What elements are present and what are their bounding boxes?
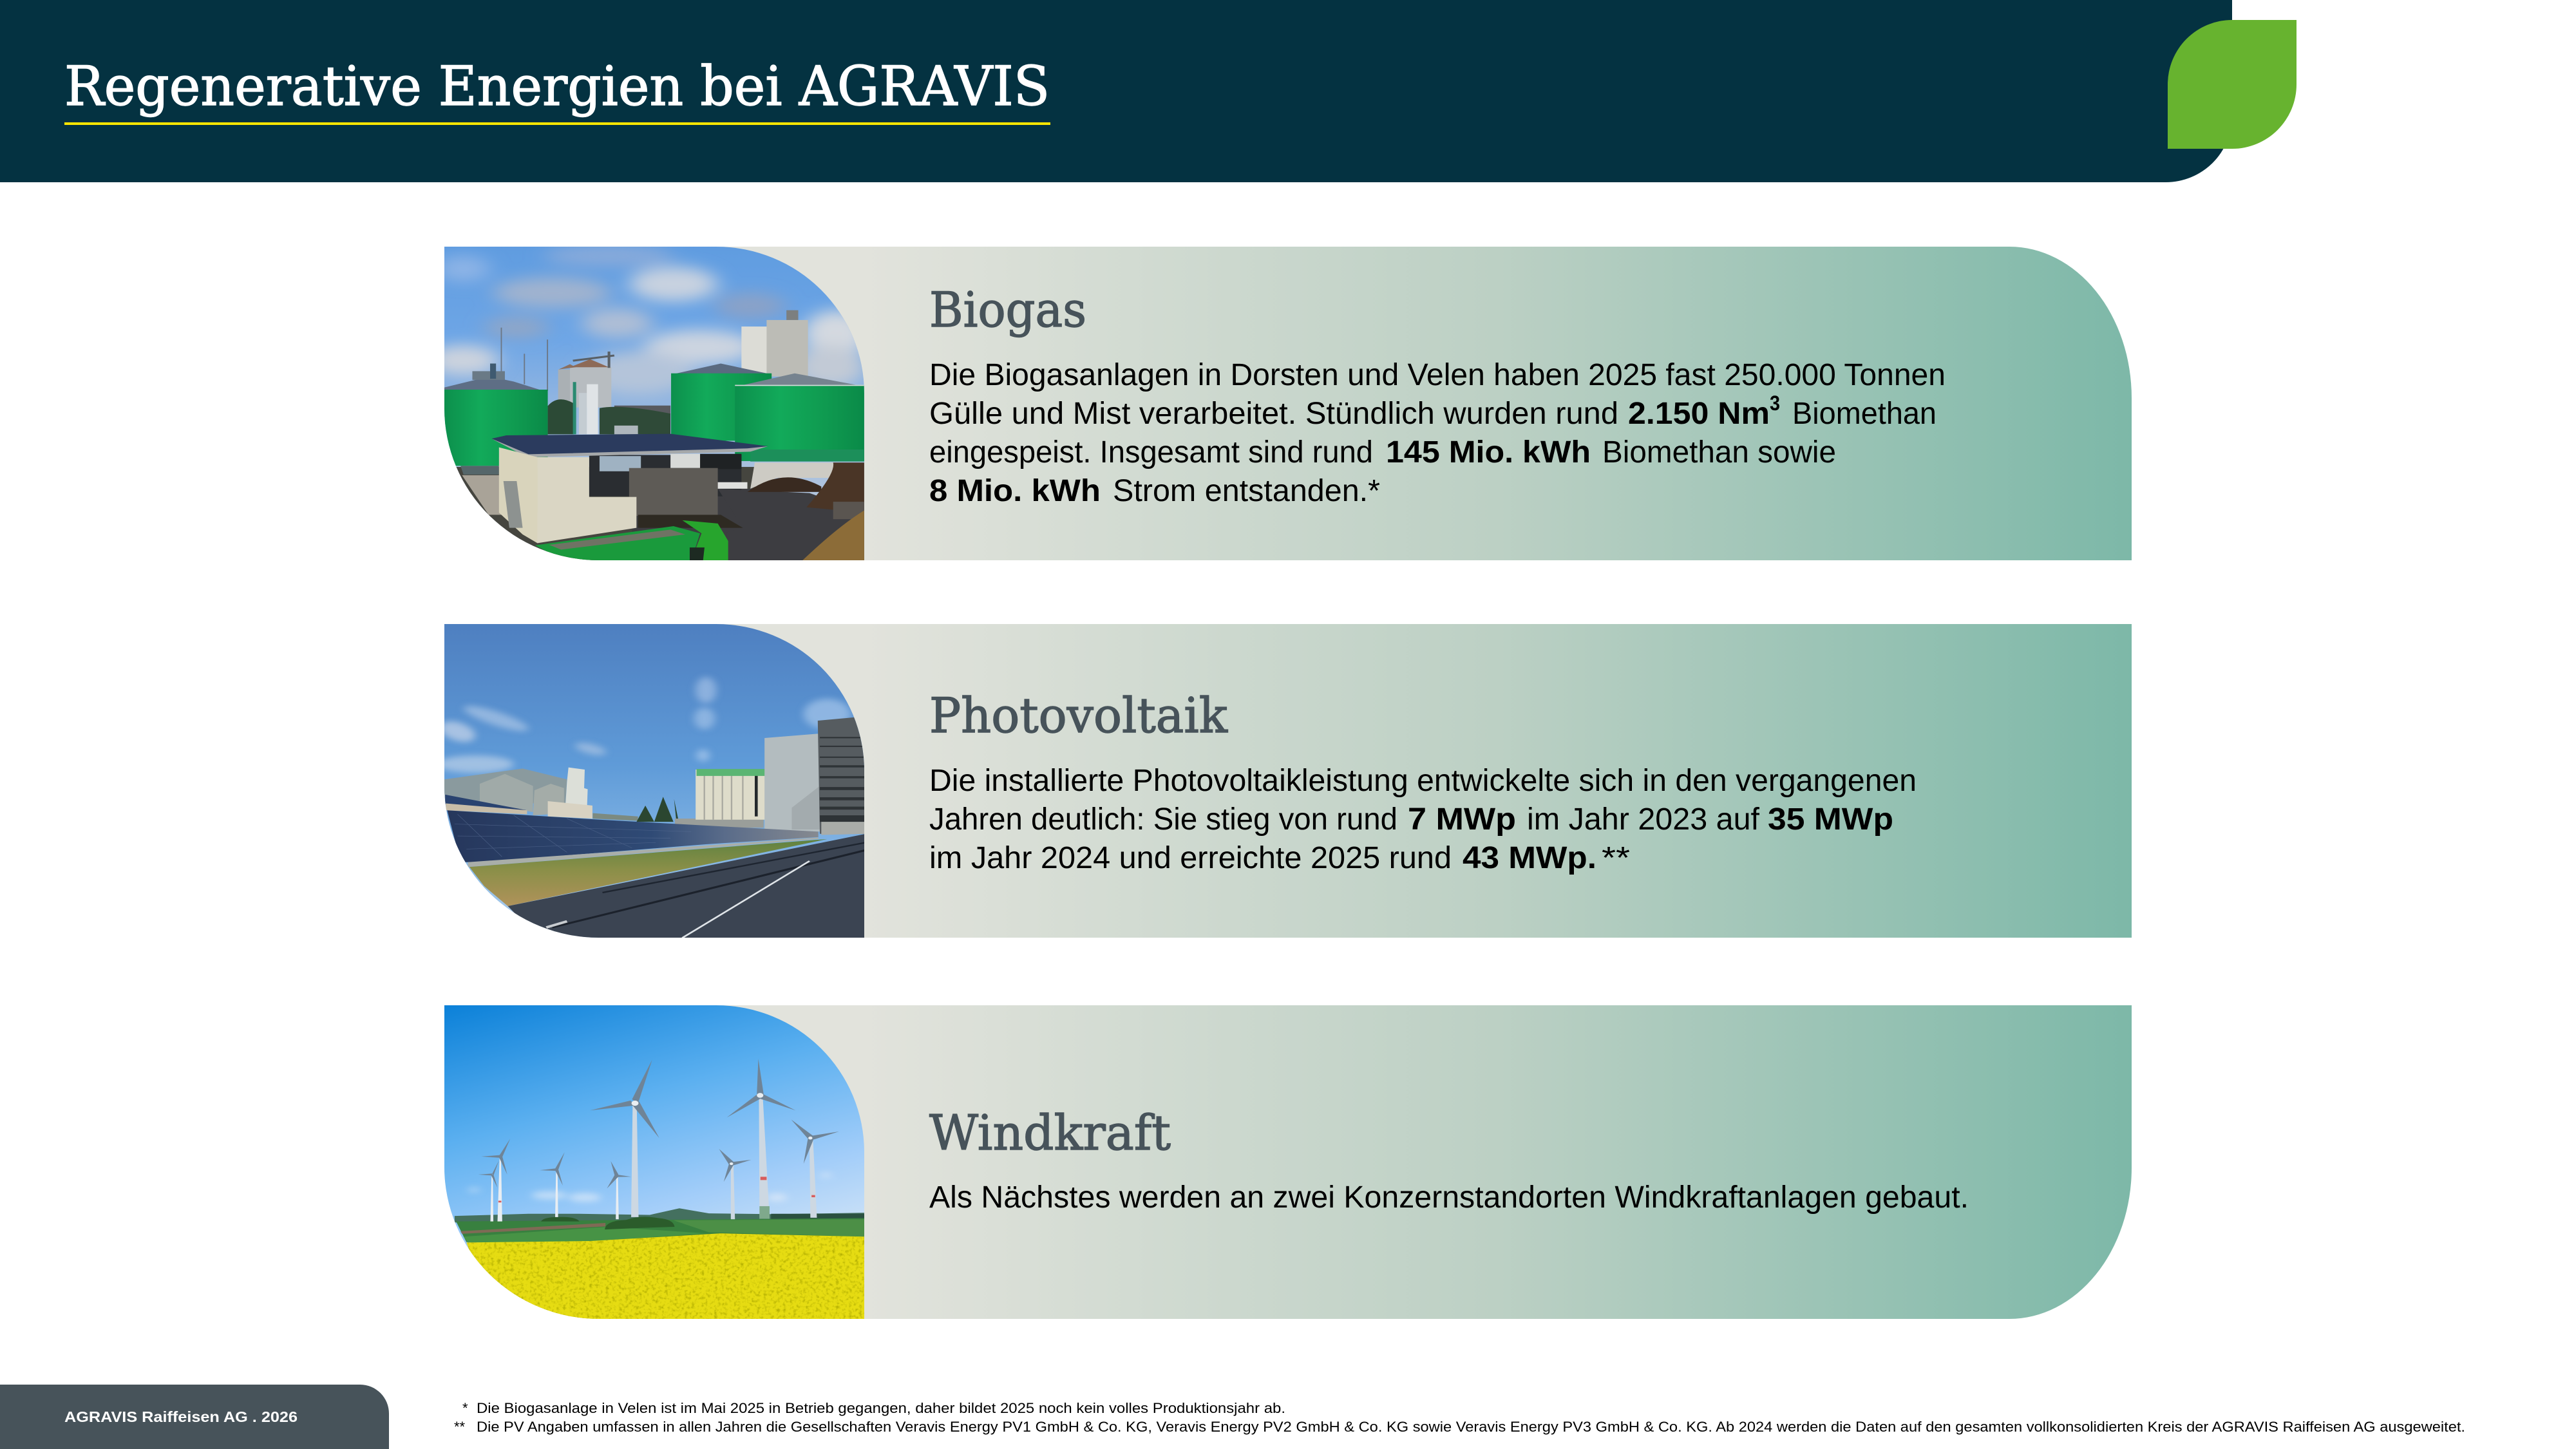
- icon: green leaf logo: [2168, 20, 2297, 149]
- photovoltaik body text: 43 MWp.: [1463, 841, 1596, 875]
- biogas body text: 145 Mio. kWh: [1386, 435, 1591, 469]
- photovoltaik body text: im Jahr 2024 und erreichte 2025 rund: [929, 841, 1452, 875]
- biogas body text: eingespeist. Insgesamt sind rund: [929, 435, 1373, 469]
- biogas photo: [428, 245, 869, 563]
- footnotes: *: [462, 1400, 468, 1416]
- panel: Photovoltaik: [435, 623, 2132, 943]
- biogas body text: Biomethan sowie: [1602, 435, 1836, 469]
- photovoltaik heading: Photovoltaik: [929, 687, 1228, 744]
- panel: Windkraft: [443, 1004, 2132, 1325]
- biogas body text: Die Biogasanlagen in Dorsten und Velen haben 2025 fast 250.000 Tonnen: [929, 358, 1946, 392]
- biogas body text: Strom entstanden.*: [1113, 474, 1380, 508]
- title: Regenerative Energien bei AGRAVIS: [64, 55, 1050, 118]
- biogas body text: 3: [1770, 392, 1780, 415]
- biogas body text: 2.150 Nm: [1628, 397, 1770, 431]
- photovoltaik body text: **: [1602, 841, 1630, 875]
- footnotes: Die PV Angaben umfassen in allen Jahren die Gesellschaften Veravis Energy PV1 GmbH & Co. KG, Veravis Energy PV2 GmbH & Co. KG sowie Veravis Energy PV3 GmbH & Co. KG. Ab 2024 werden die Daten auf den gesamten vollkonsolidierten Kreis der AGRAVIS Raiffeisen AG ausgeweitet.: [477, 1419, 2465, 1435]
- photovoltaik photo: [435, 623, 866, 943]
- photovoltaik card background: [444, 624, 2132, 938]
- photovoltaik body text: 35 MWp: [1768, 802, 1893, 837]
- photovoltaik body text: 7 MWp: [1408, 802, 1516, 837]
- footnotes: **: [454, 1419, 466, 1435]
- biogas body text: 8 Mio. kWh: [929, 474, 1101, 508]
- photovoltaik body text: Jahren deutlich: Sie stieg von rund: [929, 802, 1397, 837]
- footer tab: AGRAVIS Raiffeisen AG . 2026: [64, 1408, 298, 1425]
- biogas body text: [929, 358, 1946, 508]
- windkraft body text: Als Nächstes werden an zwei Konzernstandorten Windkraftanlagen gebaut.: [929, 1180, 1969, 1215]
- biogas body text: Biomethan: [1792, 397, 1937, 431]
- biogas card background: [444, 247, 2132, 560]
- footnotes: Die Biogasanlage in Velen ist im Mai 2025 in Betrieb gegangen, daher bildet 2025 noch kein volles Produktionsjahr ab.: [477, 1400, 1285, 1416]
- windkraft heading: Windkraft: [929, 1104, 1171, 1161]
- footnotes: [454, 1400, 2465, 1435]
- biogas heading: Biogas: [929, 281, 1086, 338]
- header bar: [0, 0, 2232, 182]
- panel: Biogas: [428, 245, 2132, 563]
- photovoltaik body text: Die installierte Photovoltaikleistung entwickelte sich in den vergangenen: [929, 764, 1917, 798]
- photovoltaik body text: im Jahr 2023 auf: [1527, 802, 1760, 837]
- photovoltaik body text: [929, 764, 1917, 875]
- footer tab: [0, 1385, 389, 1449]
- biogas body text: Gülle und Mist verarbeitet. Stündlich wurden rund: [929, 397, 1618, 431]
- windkraft card background: [444, 1005, 2132, 1319]
- windkraft photo: [443, 1004, 869, 1325]
